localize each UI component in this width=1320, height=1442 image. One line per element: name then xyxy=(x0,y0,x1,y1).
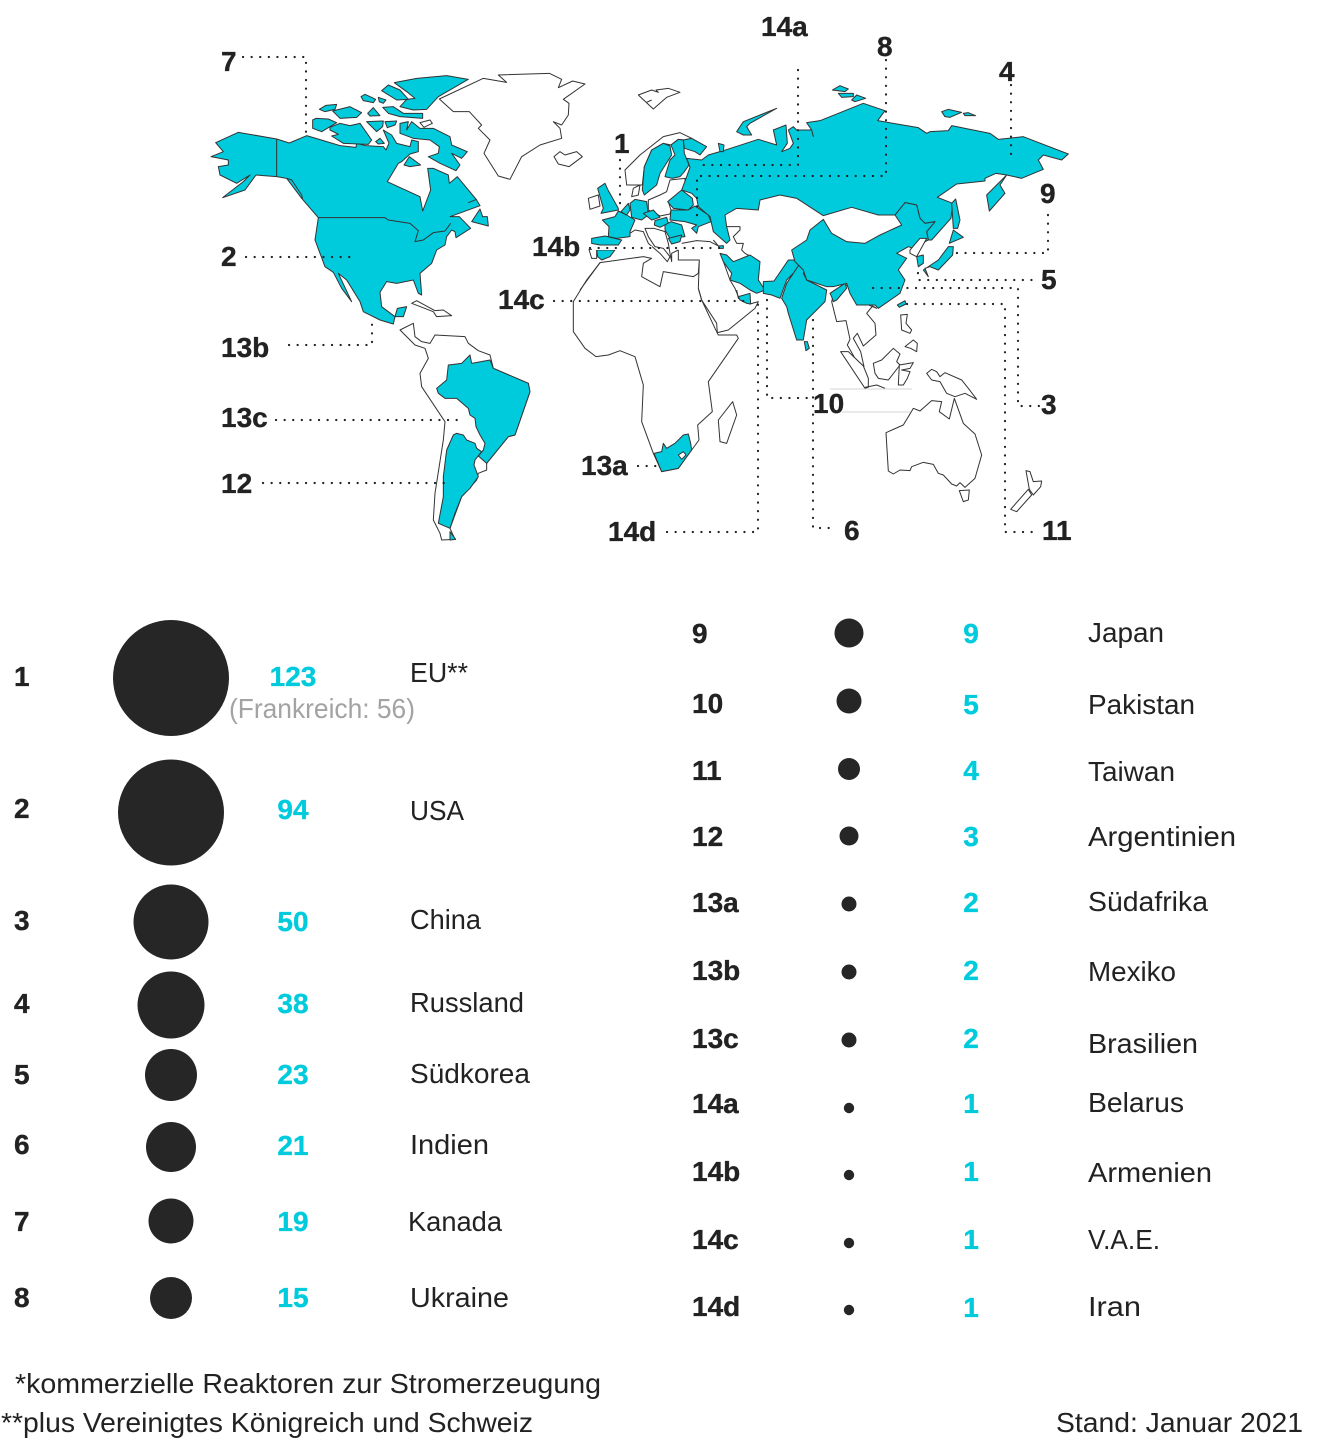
row 12: Argentinien: 3 xyxy=(963,821,979,852)
map: South America, Africa and Madagascar outlines xyxy=(400,257,758,540)
row 4: Russland: 38 xyxy=(277,988,309,1019)
row 13b: Mexiko xyxy=(692,955,1176,987)
row 14c: V.A.E. xyxy=(692,1224,1160,1255)
ranking table: left column xyxy=(14,620,530,1319)
map: Russia, China, India and other coloured Eurasian countries xyxy=(682,86,1068,340)
map labels: 14d xyxy=(608,516,656,547)
map labels: 5 xyxy=(1041,264,1057,295)
row 2: USA: 2 xyxy=(14,793,30,824)
row 1: EU: 123 xyxy=(270,661,316,692)
row 12: Argentinien: Argentinien xyxy=(1088,821,1236,852)
map labels: 13b xyxy=(221,332,269,363)
map labels: 7 xyxy=(221,46,237,77)
map: Europe and Asia outlines xyxy=(580,88,760,297)
map labels: 1 xyxy=(614,128,630,159)
map labels: 14a xyxy=(761,11,808,42)
row 4: Russland: 4 xyxy=(14,988,30,1019)
map labels: 13c xyxy=(221,402,268,433)
row 13a: Südafrika: 13a xyxy=(692,887,739,918)
map labels: 2 xyxy=(221,241,237,272)
row 13c: Brasilien: 2 xyxy=(963,1023,979,1054)
row 8: Ukraine: 8 xyxy=(14,1282,30,1313)
row 7: Kanada: Kanada xyxy=(408,1206,502,1237)
row 14b: Armenien: 1 xyxy=(963,1156,979,1187)
row 3: China: 3 xyxy=(14,905,30,936)
row 2: USA xyxy=(14,760,464,866)
row 8: Ukraine xyxy=(14,1277,509,1319)
row 8: Ukraine: 15 xyxy=(277,1282,309,1313)
row 3: China xyxy=(14,884,481,960)
map labels: 3 xyxy=(1041,389,1057,420)
row 13b: Mexiko: 13b xyxy=(692,955,740,986)
row 6: Indien: Indien xyxy=(410,1129,489,1160)
row 13c: Brasilien: Brasilien xyxy=(1088,1028,1198,1059)
map labels xyxy=(221,11,1072,547)
map labels: 11 xyxy=(1042,515,1072,546)
row 6: Indien: 6 xyxy=(14,1129,30,1160)
row 14d: Iran xyxy=(692,1291,1141,1323)
row 13b: Mexiko: 2 xyxy=(963,955,979,986)
row 9: Japan: 9 xyxy=(692,618,708,649)
map labels: 6 xyxy=(844,515,860,546)
row 14d: Iran: 14d xyxy=(692,1291,740,1322)
row 14a: Belarus xyxy=(692,1087,1184,1119)
row 4: Russland xyxy=(14,972,524,1038)
map labels: 14b xyxy=(532,231,580,262)
map: Brazil, Argentina, South Africa xyxy=(437,355,692,540)
row 3: China: China xyxy=(410,904,481,935)
row 14c: V.A.E.: 1 xyxy=(963,1224,979,1255)
row 13a: Südafrika: Südafrika xyxy=(1088,886,1208,917)
row 7: Kanada: 7 xyxy=(14,1206,30,1237)
row 6: Indien xyxy=(14,1122,489,1172)
footnotes: Stand: Januar 2021 xyxy=(1056,1407,1303,1438)
row 14a: Belarus: Belarus xyxy=(1088,1087,1184,1118)
row 13c: Brasilien: 13c xyxy=(692,1023,739,1054)
map: Greenland, Iceland, Caribbean xyxy=(412,73,585,317)
map labels: 8 xyxy=(877,31,893,62)
row 2: USA: 94 xyxy=(277,794,309,825)
world map xyxy=(211,11,1072,547)
row 6: Indien: 21 xyxy=(277,1130,309,1161)
row 9: Japan xyxy=(692,617,1164,649)
map labels: 9 xyxy=(1040,178,1056,209)
row 1: EU xyxy=(14,620,468,736)
row 10: Pakistan: Pakistan xyxy=(1088,689,1195,720)
row 5: Südkorea xyxy=(14,1049,530,1101)
map labels: 12 xyxy=(221,468,252,499)
footnotes xyxy=(1,1368,1303,1438)
map labels: 10 xyxy=(813,388,844,419)
row 11: Taiwan xyxy=(692,755,1175,787)
row 1: EU: (Frankreich: 56) xyxy=(229,693,415,724)
row 12: Argentinien: 12 xyxy=(692,821,723,852)
row 14a: Belarus: 1 xyxy=(963,1088,979,1119)
row 1: EU: EU** xyxy=(410,657,468,688)
row 14b: Armenien: 14b xyxy=(692,1156,740,1187)
row 9: Japan: 9 xyxy=(963,618,979,649)
thin grey rules in the map xyxy=(830,389,912,412)
row 13a: Südafrika: 2 xyxy=(963,887,979,918)
row 5: Südkorea: 5 xyxy=(14,1059,30,1090)
row 14b: Armenien: Armenien xyxy=(1088,1157,1212,1188)
map labels: 13a xyxy=(581,450,628,481)
row 9: Japan: Japan xyxy=(1088,617,1164,648)
row 13a: Südafrika xyxy=(692,886,1208,918)
map: coloured European countries xyxy=(592,138,711,260)
row 7: Kanada: 19 xyxy=(277,1206,309,1237)
map: Southeast Asia and Oceania xyxy=(804,285,1042,512)
map: Europe west and north, uncoloured countries xyxy=(588,133,692,258)
row 5: Südkorea: 23 xyxy=(277,1059,309,1090)
row 12: Argentinien xyxy=(692,821,1236,852)
footnotes: **plus Vereinigtes Königreich und Schweiz xyxy=(1,1407,533,1438)
row 14c: V.A.E.: V.A.E. xyxy=(1088,1224,1160,1255)
row 14b: Armenien xyxy=(692,1156,1212,1188)
row 1: EU: 1 xyxy=(14,661,30,692)
map labels: 14c xyxy=(498,284,545,315)
ranking table: right column xyxy=(692,617,1236,1323)
row 14a: Belarus: 14a xyxy=(692,1088,739,1119)
row 8: Ukraine: Ukraine xyxy=(410,1282,509,1313)
row 5: Südkorea: Südkorea xyxy=(410,1058,530,1089)
white strip behind leader line 14b xyxy=(592,246,652,250)
row 14d: Iran: Iran xyxy=(1088,1291,1141,1322)
row 14c: V.A.E.: 14c xyxy=(692,1224,739,1255)
dotted leader lines xyxy=(243,57,1048,532)
row 10: Pakistan xyxy=(692,688,1195,720)
row 13b: Mexiko: Mexiko xyxy=(1088,956,1176,987)
map: North America xyxy=(211,76,488,324)
row 13c: Brasilien xyxy=(692,1023,1198,1059)
row 4: Russland: Russland xyxy=(410,987,524,1018)
row 2: USA: USA xyxy=(410,795,464,826)
row 11: Taiwan: 4 xyxy=(963,755,979,786)
row 7: Kanada xyxy=(14,1198,502,1244)
map labels: 4 xyxy=(999,56,1015,87)
row 14d: Iran: 1 xyxy=(963,1292,979,1323)
footnotes: *kommerzielle Reaktoren zur Stromerzeugung xyxy=(15,1368,601,1399)
row 3: China: 50 xyxy=(277,906,309,937)
row 11: Taiwan: Taiwan xyxy=(1088,756,1175,787)
row 10: Pakistan: 10 xyxy=(692,688,723,719)
row 11: Taiwan: 11 xyxy=(692,755,722,786)
row 10: Pakistan: 5 xyxy=(963,689,979,720)
